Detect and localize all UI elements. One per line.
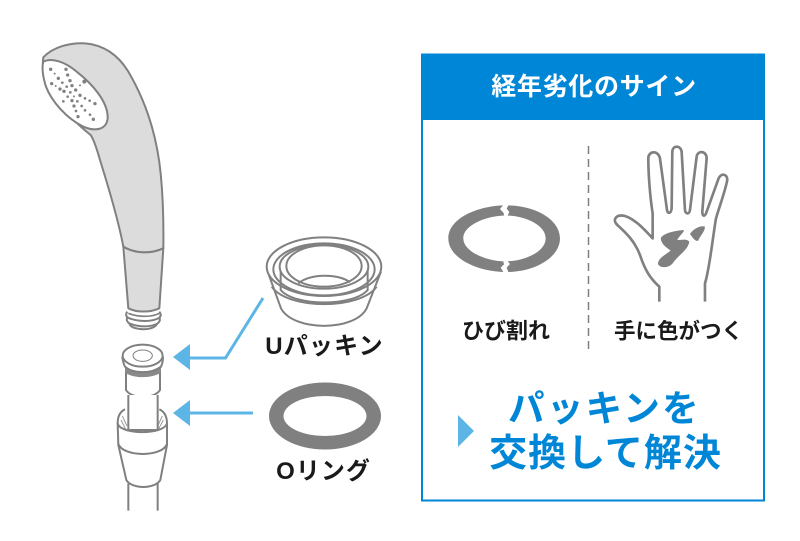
arrow: O ring to fitting <box>173 400 253 426</box>
icon: O ring <box>269 382 381 450</box>
fitting stem <box>128 395 158 430</box>
solution text: 交換して解決 <box>489 433 722 475</box>
arrow: U packing to fitting <box>173 298 263 370</box>
handle neck <box>123 247 163 312</box>
panel: signs of aging <box>421 54 765 500</box>
illustration: hose fitting <box>118 345 167 511</box>
stain <box>658 230 689 267</box>
panel border <box>422 54 764 500</box>
fitting neck <box>126 372 160 397</box>
panel title: 経年劣化のサイン <box>491 73 697 101</box>
label: cracks: ひび割れ <box>462 318 550 344</box>
triangle marker <box>458 415 474 447</box>
stain small <box>690 226 705 241</box>
collar step <box>118 444 167 454</box>
hose <box>128 483 158 511</box>
dashed divider <box>588 146 590 350</box>
panel header <box>421 54 765 120</box>
shower head body <box>43 43 163 252</box>
label: U packing: Uパッキン <box>265 333 384 360</box>
illustration: shower head <box>43 43 163 329</box>
label: O ring: Oリング <box>276 457 371 485</box>
fitting threads <box>125 365 161 377</box>
collar <box>118 423 167 487</box>
hand outline <box>615 147 727 302</box>
solution text <box>489 388 722 475</box>
solution text: パッキンを <box>508 388 701 429</box>
label: hand stains: 手に色がつく <box>614 318 743 344</box>
icon: U packing <box>267 237 381 326</box>
spray face <box>43 60 108 129</box>
spray holes <box>49 68 97 121</box>
screw thread <box>126 312 161 329</box>
collar back rim <box>118 409 167 423</box>
icon: cracked ring <box>448 205 560 272</box>
fitting top <box>122 357 163 372</box>
icon: stained hand <box>615 147 727 302</box>
